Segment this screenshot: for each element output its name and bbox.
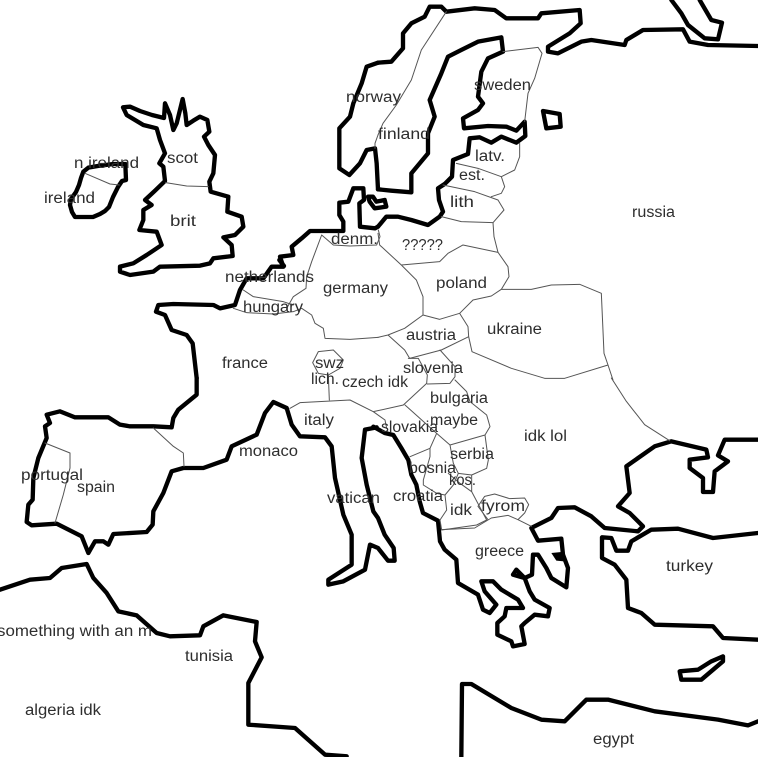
coastline: Dutch inlet blob — [279, 260, 284, 266]
borders: Nordic, Baltic, Central Europe — [378, 12, 613, 380]
label: swz: swz — [315, 355, 344, 372]
label: greece: greece — [475, 543, 524, 560]
border: Switzerland — [313, 350, 343, 375]
label: lich.: lich. — [311, 371, 339, 388]
borders: British Isles and Low Countries — [85, 135, 380, 339]
label: slovakia: slovakia — [381, 419, 438, 436]
label: finland: finland — [378, 126, 430, 143]
coastline: Norway west — [339, 63, 378, 189]
label: est.: est. — [459, 167, 485, 184]
label: denm.: denm. — [331, 231, 378, 248]
island: Greek islet — [551, 552, 564, 561]
label: maybe: maybe — [430, 412, 478, 429]
label: egypt: egypt — [593, 731, 635, 748]
north-east coastlines: Scandinavia, Baltic, Russia — [368, 0, 758, 380]
label: germany: germany — [323, 280, 388, 297]
label: serbia: serbia — [450, 446, 494, 463]
label: portugal: portugal — [21, 467, 83, 484]
label: austria: austria — [406, 327, 456, 344]
label: italy: italy — [304, 412, 334, 429]
label: idk (albania): idk — [450, 502, 472, 519]
coastline: White Sea inlet — [671, 0, 722, 39]
borders: Italy, Czech, Slovenia, Bulgaria, Serbia, Bosnia, Kosovo, Albania — [290, 350, 490, 530]
label: france: france — [222, 355, 268, 372]
south-east coastlines: Balkans, Turkey, Egypt — [373, 378, 758, 757]
label: russia: russia — [632, 204, 675, 221]
borders: Spain and Portugal — [45, 428, 184, 523]
label: croatia: croatia — [393, 488, 443, 505]
coastline: Baltic — [378, 37, 525, 227]
label: ?????: ????? — [402, 237, 443, 254]
label: slovenia: slovenia — [403, 360, 463, 377]
label: ireland: ireland — [44, 190, 95, 207]
island: lake — [543, 111, 561, 128]
label: netherlands: netherlands — [225, 269, 314, 286]
label: vatican: vatican — [327, 490, 380, 507]
label: bosnia: bosnia — [409, 460, 456, 477]
label: kos.: kos. — [449, 472, 476, 489]
label: poland: poland — [436, 275, 487, 292]
label: czech idk: czech idk — [342, 374, 408, 391]
label: monaco: monaco — [239, 443, 298, 460]
coastline: Arctic — [378, 7, 758, 63]
label: spain: spain — [77, 479, 115, 496]
coastline: Iberia, southern France, Italy — [27, 378, 395, 585]
label: bulgaria: bulgaria — [430, 390, 488, 407]
coastline: Adriatic, Greece, Black Sea — [373, 427, 758, 646]
north-west coastlines: Ireland, Britain, France, Low Countries, Norway — [70, 63, 380, 378]
label: lith: lith — [450, 194, 474, 211]
island: Britain — [120, 99, 243, 275]
borders: central Europe and western Balkans — [290, 350, 490, 530]
label: something with an m: something with an m — [0, 623, 152, 640]
coastline: France to Denmark — [156, 188, 378, 378]
label: fyrom: fyrom — [481, 498, 525, 515]
label: sweden: sweden — [474, 77, 531, 94]
island: Cyprus — [680, 656, 723, 680]
label: idk lol: idk lol — [524, 428, 567, 445]
coastline: Turkey — [602, 529, 758, 640]
label: latv.: latv. — [475, 148, 505, 165]
coastline: Egypt — [461, 684, 758, 757]
label: norway: norway — [346, 89, 401, 106]
island: Ireland — [70, 164, 126, 217]
label: hungary: hungary — [243, 299, 303, 316]
label: tunisia: tunisia — [185, 648, 233, 665]
borders: Black Sea region, Greece, Fyrom — [441, 378, 670, 530]
label: scot: scot — [167, 150, 199, 167]
label: algeria idk: algeria idk — [25, 702, 101, 719]
south-west coastlines: Iberia, France, Italy, North Africa — [0, 378, 395, 756]
coastline: North Africa — [0, 564, 347, 756]
label: turkey: turkey — [666, 558, 713, 575]
label: n ireland: n ireland — [74, 155, 139, 172]
island: Danish islets — [368, 197, 386, 208]
label: brit: brit — [170, 213, 197, 230]
label: ukraine: ukraine — [487, 321, 542, 338]
